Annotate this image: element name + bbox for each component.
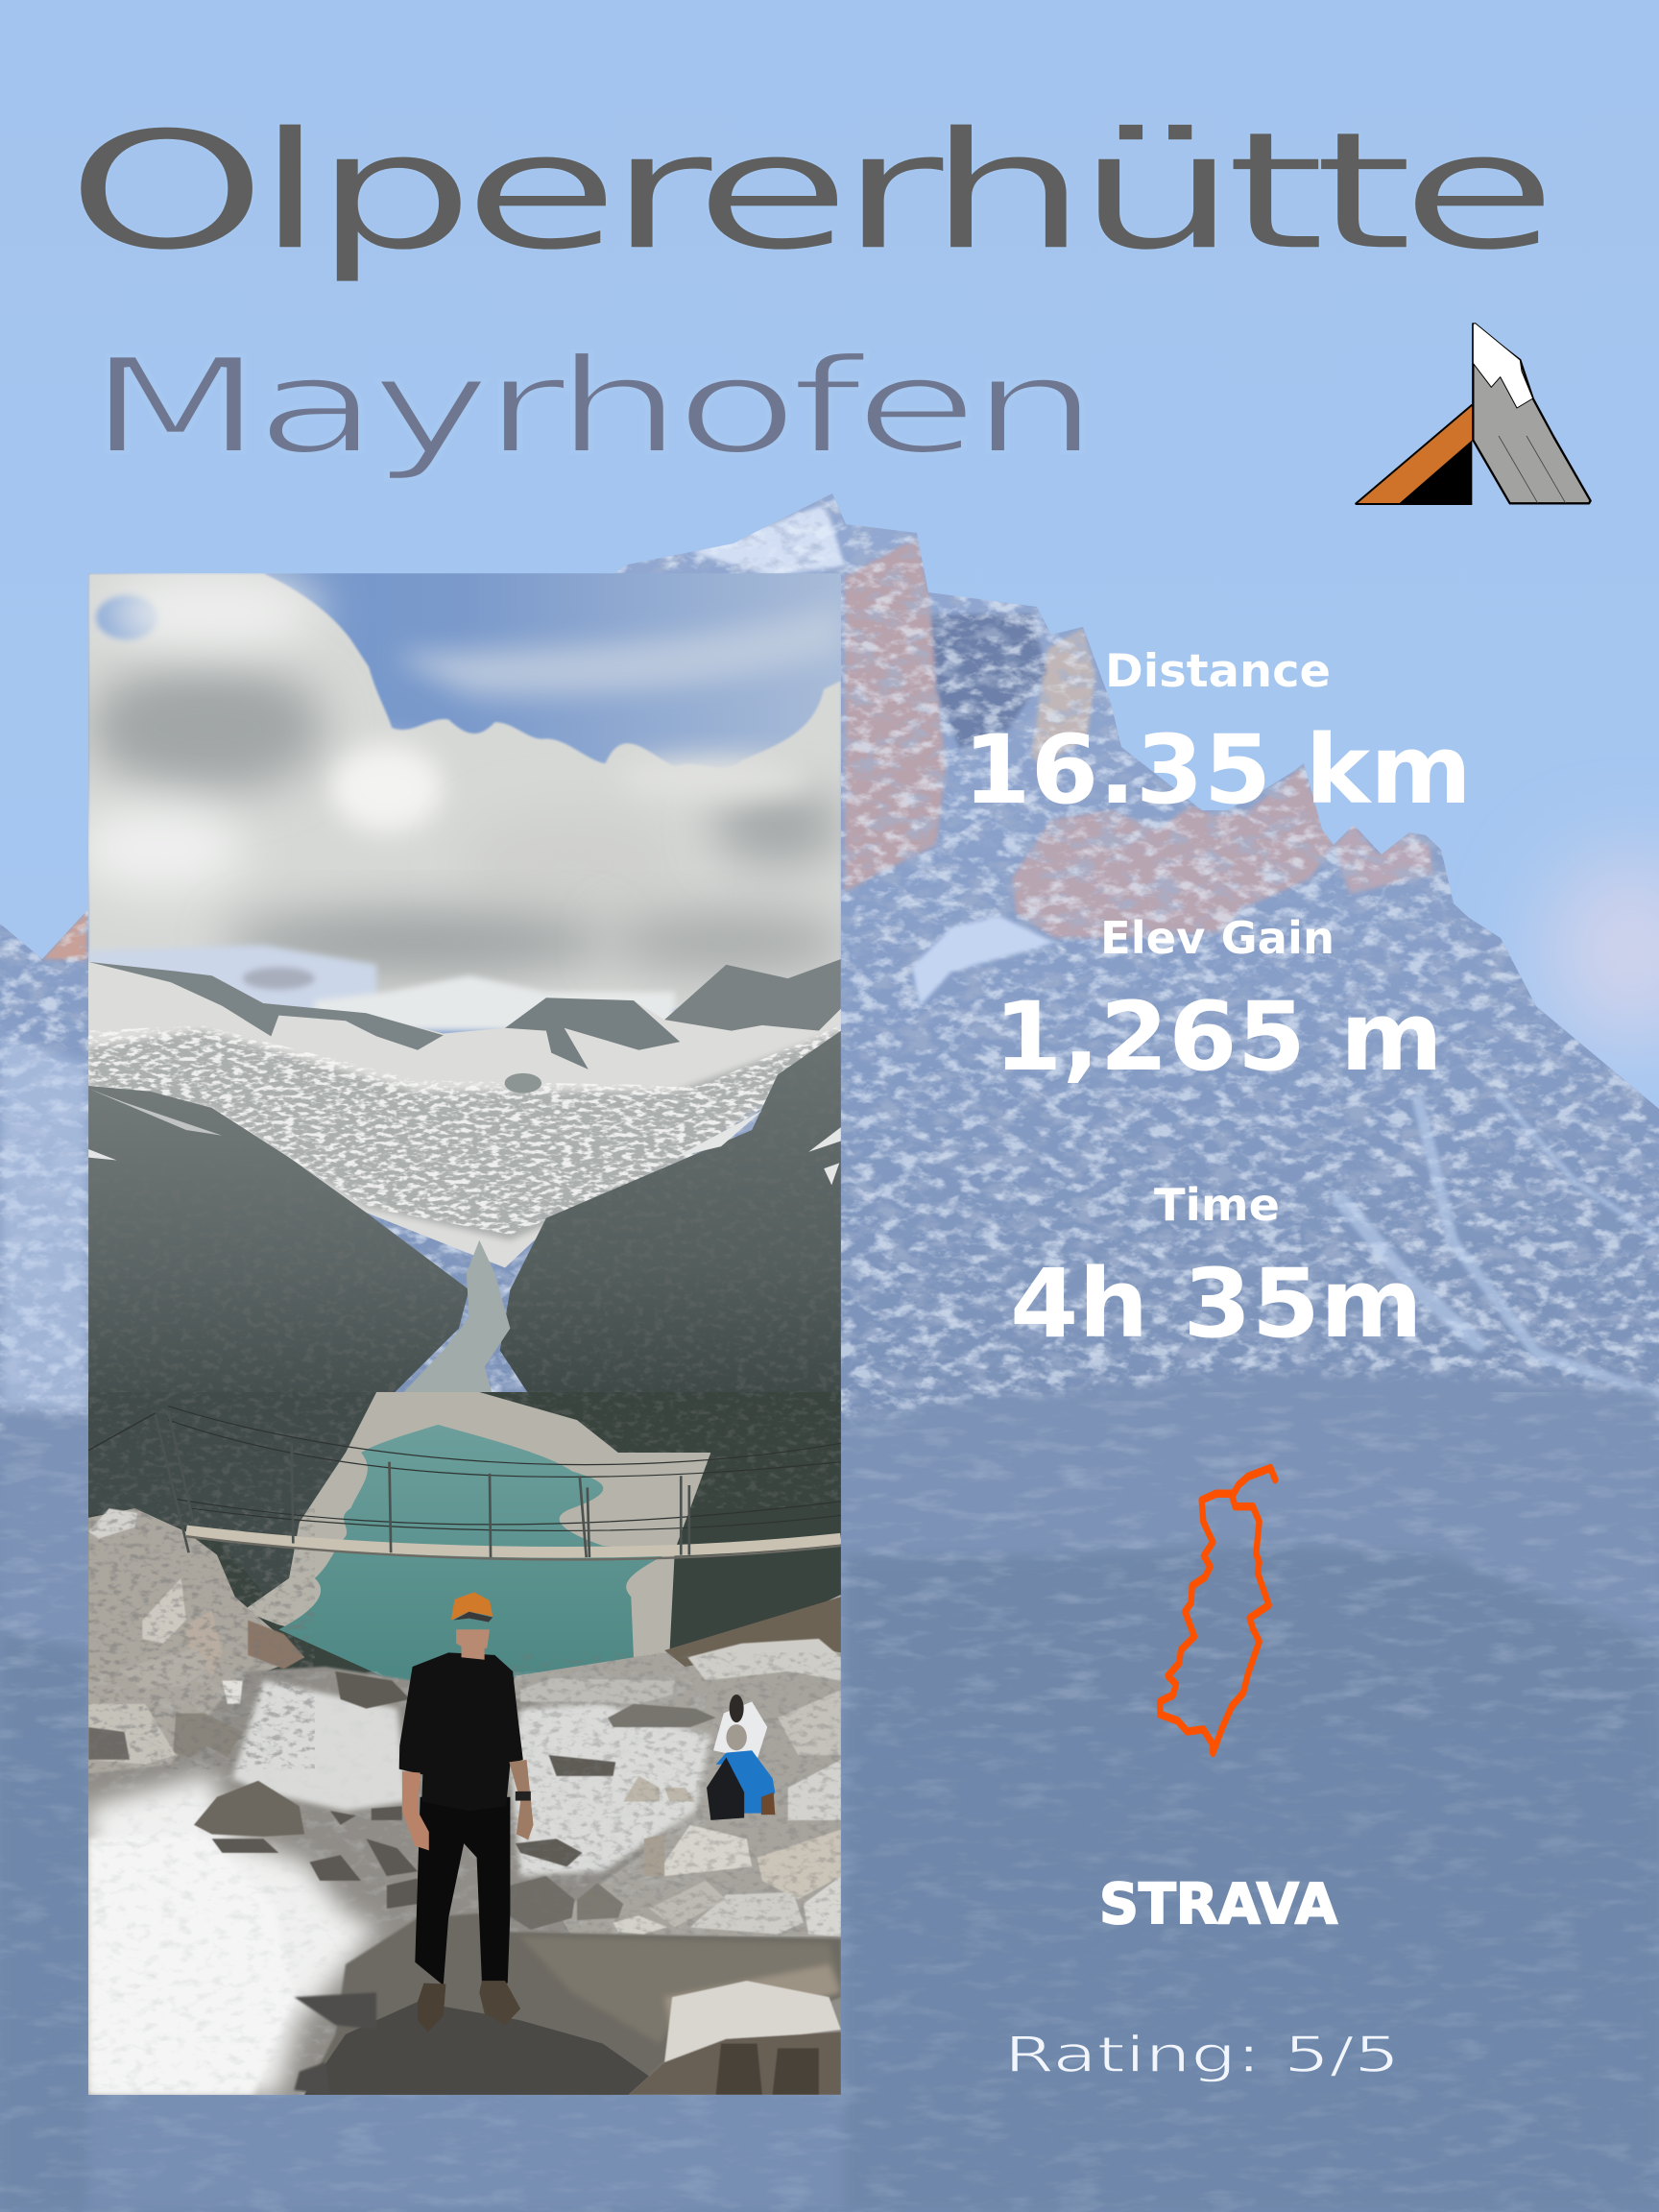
subtitle: Mayrhofen: Mayrhofen (87, 329, 1091, 484)
rock pile on left bank (88, 1508, 304, 1773)
title: Olpererhütte: Olpererhütte (65, 97, 1546, 287)
logo: STRAVA: STRAVA (1099, 1871, 1337, 1936)
suspension bridge (88, 1407, 841, 1559)
background: sky and mountain (0, 493, 1659, 2212)
stat label: Elev Gain: Elev Gain (1100, 912, 1334, 964)
stat label: Time: Time (1154, 1179, 1280, 1231)
person: hiker with orange cap (399, 1592, 534, 2032)
stat value: 4h 35m: 4h 35m (1010, 1249, 1423, 1359)
photo: hiker at suspension bridge above reservoir (73, 573, 850, 2095)
distant rocky bank (500, 1595, 841, 1936)
boulders (88, 1508, 841, 2095)
photo lower part: reservoir, rocks, stream (88, 1392, 841, 2095)
wet rock slab (304, 1913, 841, 2095)
reservoir (278, 1425, 669, 1681)
stat value: 1,265 m: 1,265 m (994, 982, 1443, 1093)
photo upper part: sky, clouds, glacier and valley (73, 573, 850, 1421)
route map (1160, 1468, 1275, 1753)
rating: Rating: 5/5 (1004, 2027, 1400, 2084)
stat value: 16.35 km: 16.35 km (963, 715, 1472, 826)
stat label: Distance: Distance (1105, 645, 1331, 698)
person in background: white shirt and blue jacket (707, 1695, 775, 1820)
stream base (88, 1665, 709, 1903)
whitewater at lower left (88, 1773, 376, 2095)
icon: mountain and tent logo (1356, 324, 1591, 504)
